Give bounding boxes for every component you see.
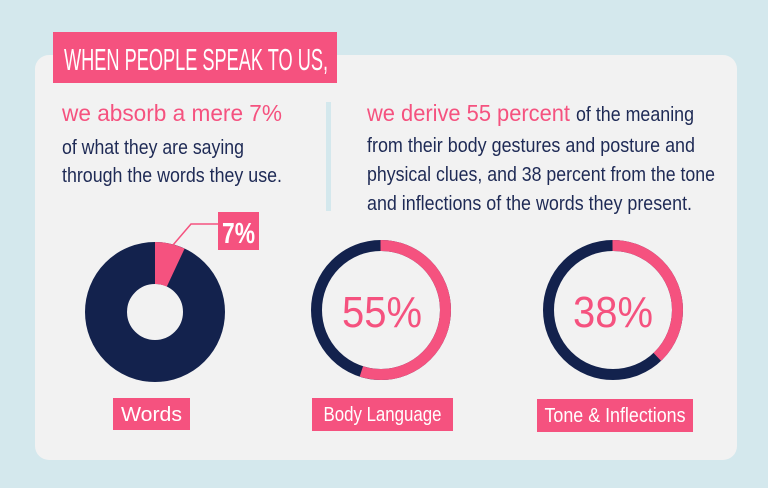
label: Words [113, 398, 190, 430]
text block: words: of what they are saying [62, 137, 244, 159]
title: WHEN PEOPLE SPEAK TO US, [64, 42, 328, 77]
text block: words: we absorb a mere 7% [61, 100, 282, 126]
label: Words: Words [121, 404, 182, 426]
label: Tone & Inflections [537, 399, 693, 432]
text block: body language and tone: physical clues, and 38 percent from the tone [367, 164, 715, 186]
callout: 7%: 7% [222, 218, 255, 250]
chart: words donut [106, 212, 259, 361]
label: Tone & Inflections: Tone & Inflections [544, 405, 686, 427]
panel: main card [35, 55, 737, 460]
text block: words: through the words they use. [62, 165, 282, 187]
text block: body language and tone [366, 100, 715, 215]
chart: body language ring: 55% [342, 288, 422, 337]
label: Body Language: Body Language [324, 404, 442, 426]
chart: tone ring: 38% [573, 288, 653, 337]
callout: 7% [173, 212, 259, 250]
divider [326, 102, 331, 211]
title [53, 32, 337, 83]
label: Body Language [312, 398, 453, 431]
chart: body language ring [316, 246, 446, 374]
chart: tone ring [548, 246, 678, 374]
text block: body language and tone: we derive 55 percent [366, 100, 571, 126]
text block: words [61, 100, 282, 187]
text block: body language and tone: and inflections of the words they present. [367, 193, 692, 215]
text block: body language and tone: from their body gestures and posture and [367, 135, 695, 157]
text block: body language and tone: of the meaning [576, 104, 694, 126]
